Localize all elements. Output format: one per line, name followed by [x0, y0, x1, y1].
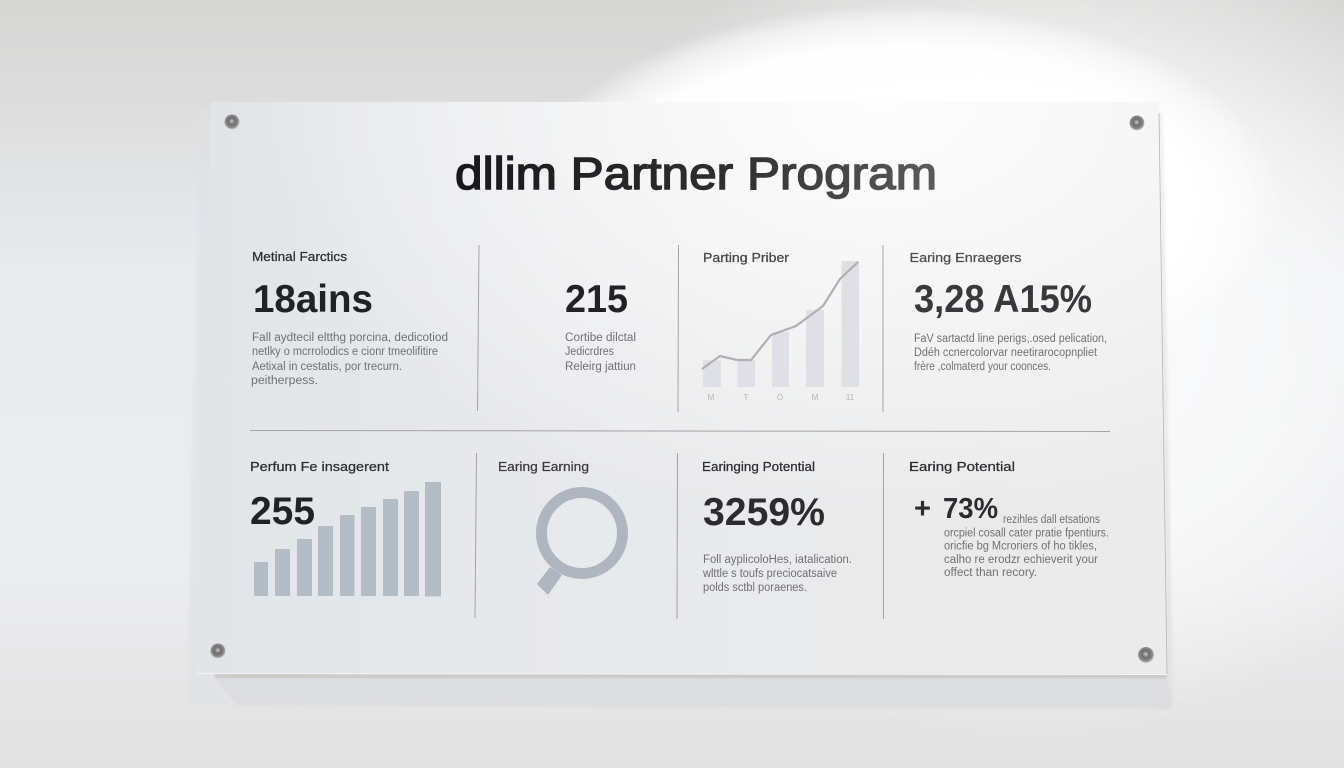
icon: magnifier — [537, 492, 622, 595]
heading: Perfum Fe insagerent — [250, 460, 390, 474]
heading: Earing Potential — [909, 460, 1015, 474]
description: Foll ayplicoloHes, iatalication. — [703, 554, 852, 566]
big figure: 73% — [943, 493, 998, 525]
big figure: + — [914, 493, 931, 525]
description — [914, 333, 1107, 373]
description: polds sctbl poraenes. — [703, 582, 807, 594]
big figure: 18ains — [253, 278, 373, 321]
panel: Metinal Farctics — [251, 250, 448, 387]
panel: Perfum Fe insagerent — [250, 460, 441, 596]
description: oricfie bg Mcroriers of ho tikles, — [944, 540, 1097, 552]
big figure: 3,28 A15% — [914, 278, 1092, 321]
heading: Parting Priber — [703, 251, 789, 265]
description: orcpiel cosall cater pratie fpentiurs. — [944, 528, 1109, 540]
panel: Earing Enraegers — [910, 251, 1107, 373]
description: FaV sartactd line perigs,.osed pelication, — [914, 333, 1107, 345]
chart axis labels: T — [744, 393, 749, 402]
description: peitherpess. — [251, 375, 318, 387]
chart axis labels: M — [812, 393, 819, 402]
big figure: 255 — [250, 490, 315, 533]
panel: 215 — [565, 278, 636, 373]
icon: mounting bolt top left — [224, 114, 240, 130]
bar chart — [254, 482, 441, 596]
heading: Earing Enraegers — [910, 251, 1022, 265]
heading: Earinging Potential — [702, 460, 815, 474]
description — [702, 554, 852, 594]
icon: mounting bolt top right — [1130, 116, 1144, 130]
big figure — [914, 493, 998, 525]
chart axis labels: O — [777, 393, 783, 402]
description: Ddéh ccnercolorvar neetirarocopnpliet — [914, 347, 1098, 359]
description: Jedicrdres — [565, 346, 614, 358]
chart axis labels: 11 — [846, 393, 855, 402]
description: offect than recory. — [944, 567, 1037, 579]
chart: bars and trend line — [702, 261, 859, 402]
description: rezihles dall etsations — [1003, 514, 1100, 526]
description: frère ,colmaterd your coonces. — [914, 361, 1051, 373]
mounted panel — [197, 102, 1167, 674]
panel: Parting Priber — [702, 251, 859, 402]
description: calho re erodzr echieverit your — [944, 554, 1098, 566]
description: netlky o mcrrolodics e cionr tmeolifitire — [252, 346, 438, 358]
panel: Earing Potential — [909, 460, 1109, 579]
panel shadow — [187, 110, 1173, 709]
big figure: 215 — [565, 278, 628, 321]
description — [944, 514, 1109, 579]
icon: mounting bolt bottom right — [1138, 647, 1154, 663]
description: Releirg jattiun — [565, 361, 636, 373]
title: dllim Partner Program — [455, 148, 937, 199]
description — [251, 332, 448, 387]
description — [565, 332, 636, 373]
chart axis labels — [708, 393, 855, 402]
description: Cortibe dilctal — [565, 332, 636, 344]
heading: Earing Earning — [498, 460, 589, 474]
big figure: 3259% — [703, 491, 825, 534]
panel: Earing Earning — [498, 460, 622, 595]
description: Aetixal in cestatis, por trecurn. — [252, 361, 402, 373]
description: wlttle s toufs preciocatsaive — [702, 568, 837, 580]
chart axis labels: M — [708, 393, 715, 402]
description: Fall aydtecil eltthg porcina, dedicotiod — [252, 332, 448, 344]
panel: Earinging Potential — [702, 460, 852, 594]
heading: Metinal Farctics — [252, 250, 347, 264]
icon: mounting bolt bottom left — [210, 644, 226, 658]
